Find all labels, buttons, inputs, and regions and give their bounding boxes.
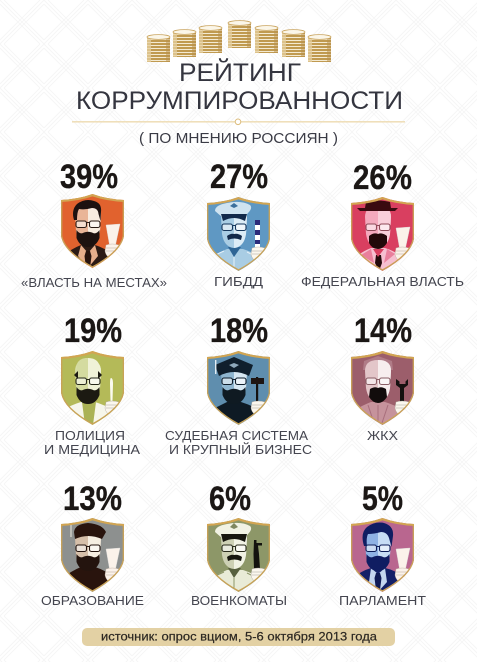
label [165, 428, 312, 457]
icon: shield local authorities [61, 194, 124, 268]
label [44, 428, 140, 457]
source note [82, 628, 395, 646]
title: РЕЙТИНГ [179, 57, 301, 87]
label: И КРУПНЫЙ БИЗНЕС [169, 442, 312, 457]
icon: shield military offices [207, 518, 270, 592]
percent 18: 18% [210, 312, 268, 350]
panel: education 13% [41, 480, 144, 608]
percent 27: 27% [210, 158, 268, 196]
label: ЖКХ [367, 428, 398, 443]
label: ГИБДД [214, 274, 263, 289]
icon: shield education [61, 518, 124, 592]
percent 6: 6% [209, 480, 251, 518]
icon: shield federal authorities [351, 197, 414, 271]
icon: shield housing utilities [351, 351, 414, 425]
label: ПОЛИЦИЯ [55, 428, 125, 443]
percent 14: 14% [354, 312, 412, 350]
icon: coin stacks [147, 21, 331, 62]
percent 19: 19% [64, 312, 122, 350]
percent 5: 5% [362, 480, 403, 518]
percent 39: 39% [60, 158, 118, 196]
icon: shield traffic police [207, 197, 270, 271]
panel: courts and big business 18% [165, 312, 312, 457]
percent 26: 26% [353, 159, 412, 197]
title [76, 57, 403, 115]
icon: shield parliament [351, 518, 414, 592]
label: СУДЕБНАЯ СИСТЕМА [165, 428, 308, 443]
icon: shield police and medicine [61, 351, 124, 425]
panel: police and medicine 19% [44, 312, 140, 457]
source note: источник: опрос вциом, 5-6 октября 2013 года [101, 630, 377, 644]
title: КОРРУМПИРОВАННОСТИ [76, 87, 403, 115]
title divider [72, 119, 405, 125]
label: ВОЕНКОМАТЫ [191, 593, 287, 608]
label: ОБРАЗОВАНИЕ [41, 593, 144, 608]
label: ПАРЛАМЕНТ [339, 593, 426, 608]
panel: military offices 6% [191, 480, 287, 608]
label: ФЕДЕРАЛЬНАЯ ВЛАСТЬ [301, 274, 464, 289]
percent 13: 13% [63, 480, 122, 518]
panel: federal authorities 26% [301, 159, 464, 289]
panel: housing utilities 14% [351, 312, 414, 443]
subtitle: ( ПО МНЕНИЮ РОССИЯН ) [139, 130, 338, 147]
panel: parliament 5% [339, 480, 426, 608]
icon: shield courts and big business [207, 351, 270, 425]
panel: local authorities 39% [21, 158, 167, 290]
label: «ВЛАСТЬ НА МЕСТАХ» [21, 275, 167, 290]
label: И МЕДИЦИНА [44, 442, 140, 457]
panel: traffic police 27% [207, 158, 270, 289]
